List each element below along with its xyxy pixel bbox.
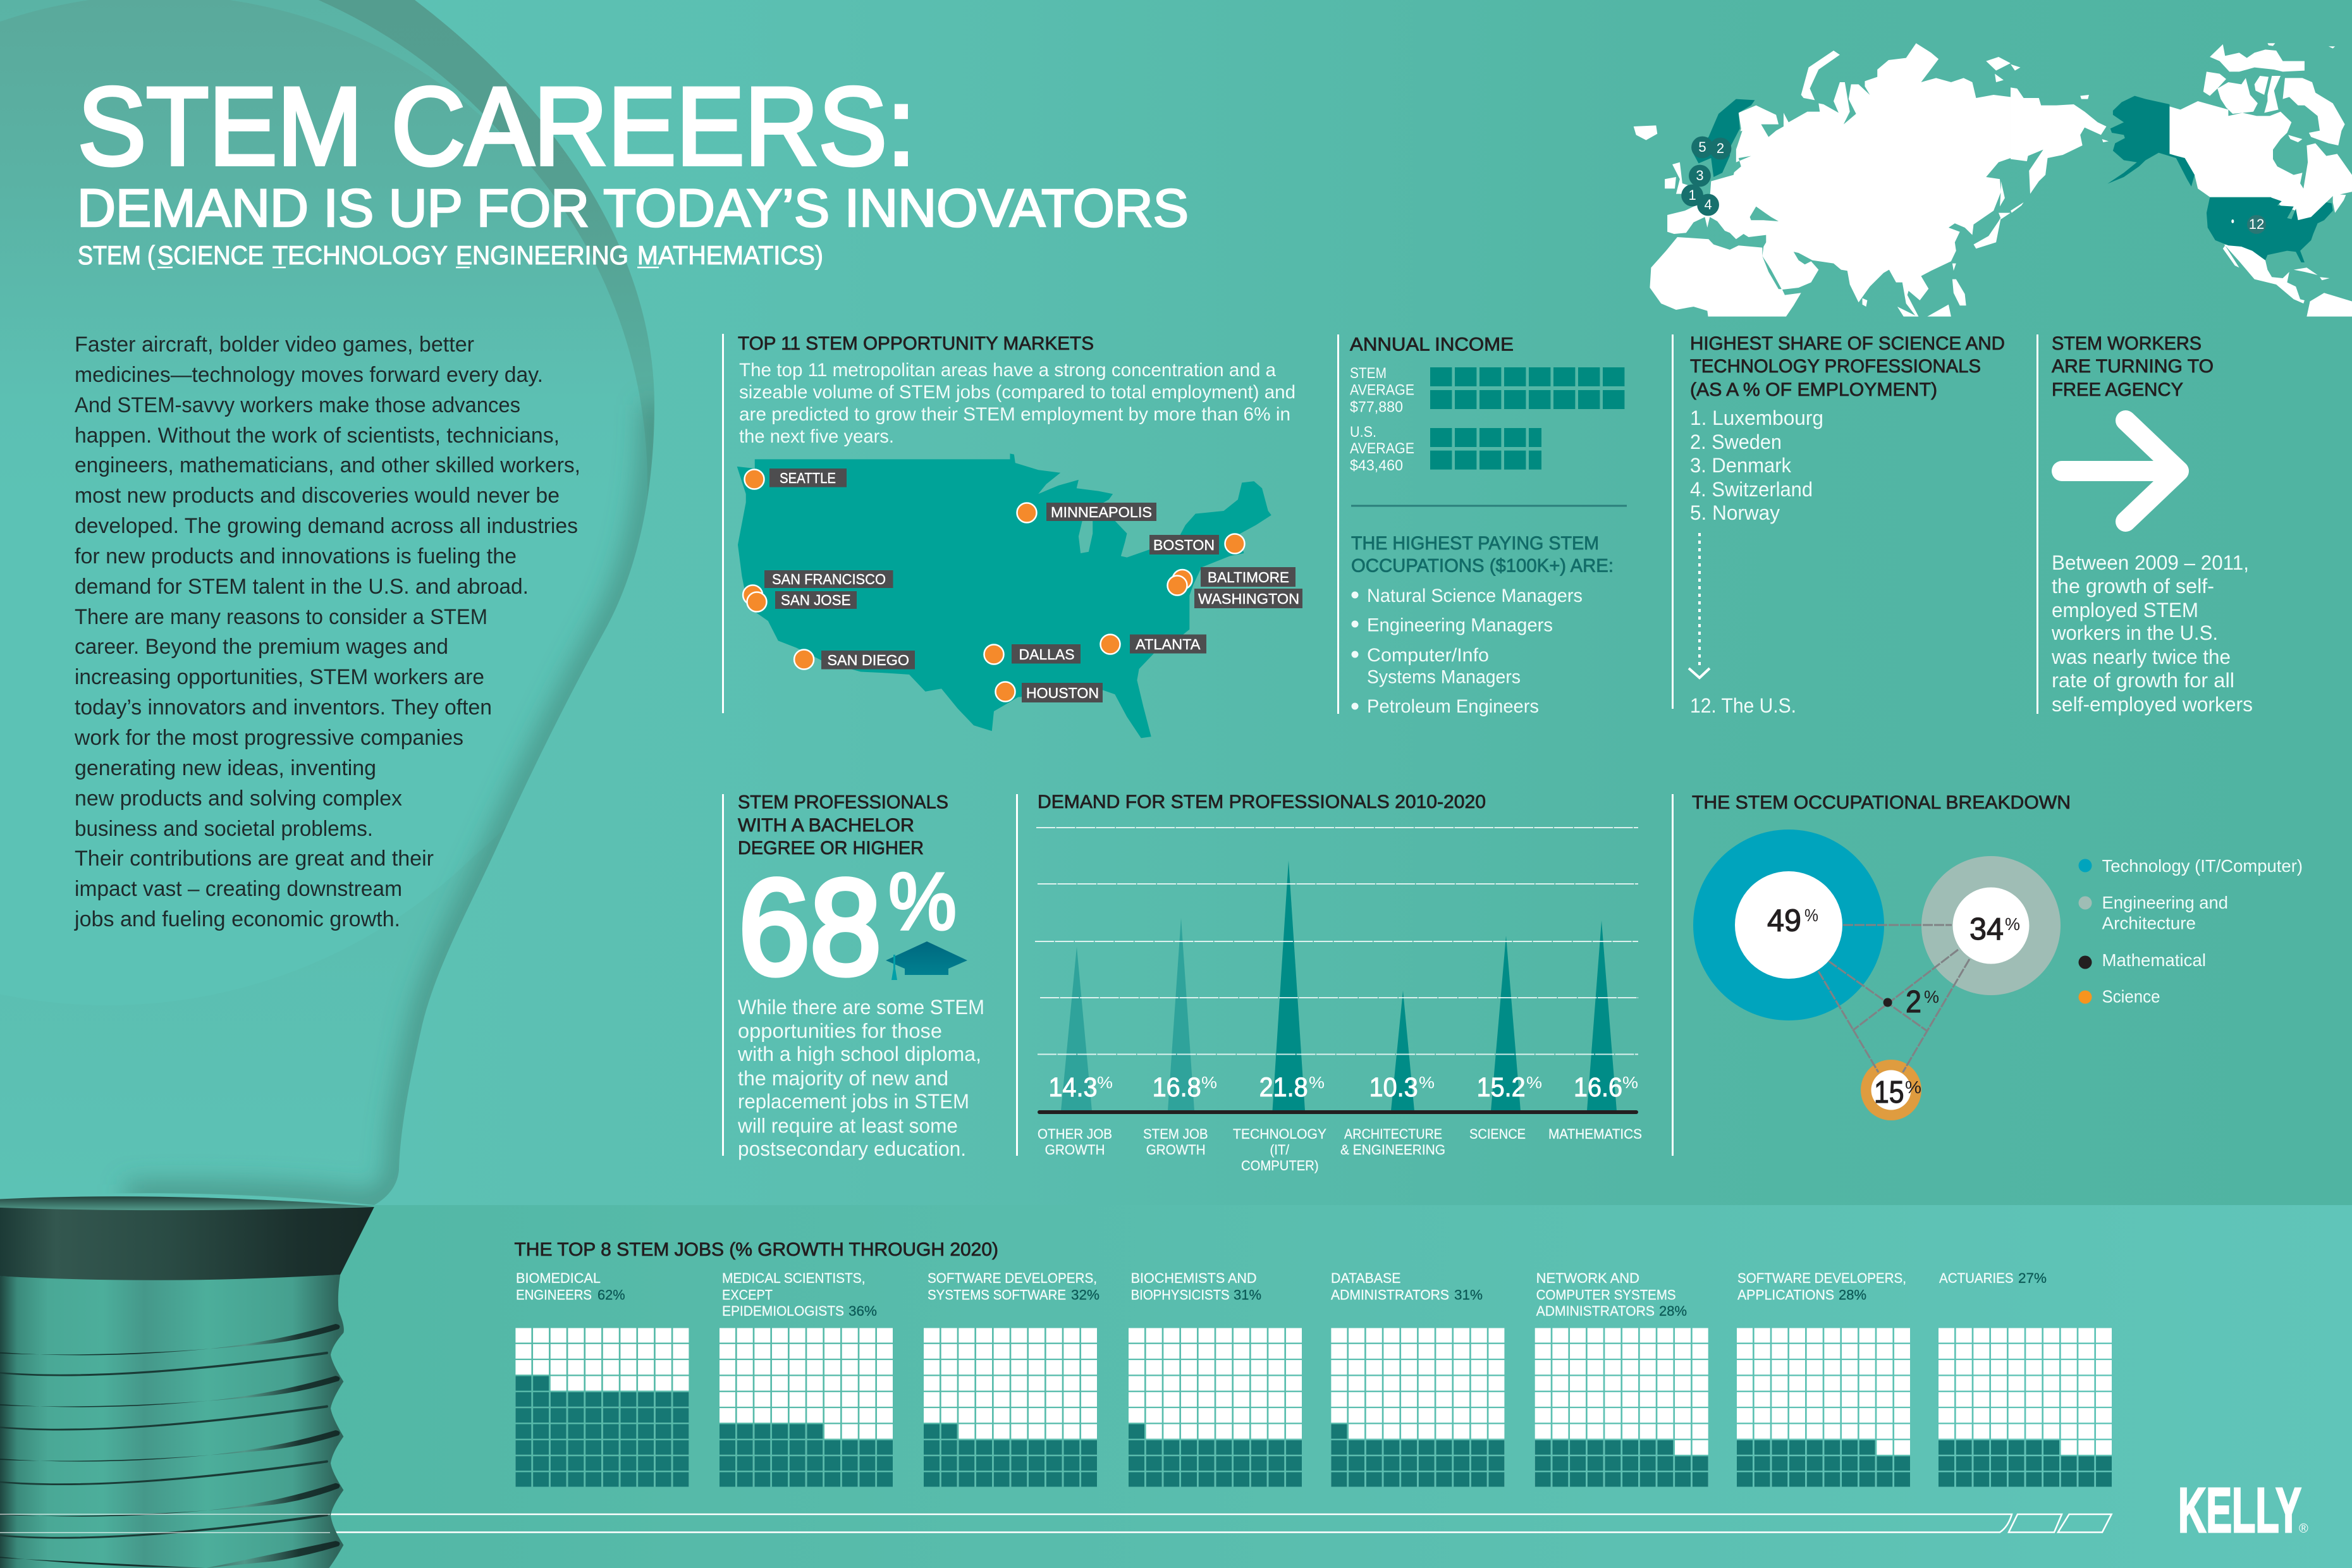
intro paragraph: And STEM-savvy workers make those advances <box>75 393 520 417</box>
description <box>739 360 1295 447</box>
city names: MINNEAPOLIS <box>1051 504 1152 520</box>
description: rate of growth for all <box>2052 669 2234 692</box>
city names: DALLAS <box>1019 646 1075 663</box>
chart category labels <box>1038 1126 1642 1173</box>
chart category labels: ARCHITECTURE <box>1344 1126 1442 1142</box>
city names: SAN FRANCISCO <box>772 571 886 587</box>
donut: science <box>1861 1060 1921 1120</box>
chart values: 21.8 <box>1259 1072 1308 1103</box>
job: database administrators: ADMINISTRATORS <box>1331 1287 1449 1303</box>
description: the next five years. <box>739 426 894 447</box>
intro paragraph: today’s innovators and inventors. They often <box>75 695 492 720</box>
panel: bachelor degree <box>722 792 984 1160</box>
city names: SEATTLE <box>780 470 836 486</box>
light bulb glass <box>0 0 695 1208</box>
description <box>2051 551 2253 716</box>
description: will require at least some <box>737 1114 958 1137</box>
highest paying list <box>1352 585 1583 717</box>
chart values: % <box>1097 1073 1113 1092</box>
description: opportunities for those <box>738 1019 942 1042</box>
intro paragraph <box>74 333 580 931</box>
icon: graduation cap <box>886 941 967 980</box>
intro paragraph: increasing opportunities, STEM workers are <box>75 665 484 689</box>
heading: TECHNOLOGY PROFESSIONALS <box>1690 356 1981 377</box>
panel: occupational breakdown <box>1672 792 2303 1156</box>
heading: STEM PROFESSIONALS <box>738 792 948 813</box>
intro paragraph: jobs and fueling economic growth. <box>74 907 400 931</box>
description: was nearly twice the <box>2051 646 2231 668</box>
job: medical scientists: EXCEPT <box>722 1287 773 1303</box>
intro paragraph: business and societal problems. <box>75 817 373 841</box>
chart grid lines <box>1035 828 1638 1055</box>
chart values: 14.3 <box>1048 1072 1098 1103</box>
job: medical scientists: EPIDEMIOLOGISTS <box>722 1303 844 1319</box>
percent labels: % <box>1924 987 1939 1007</box>
kelly logo: ® <box>2299 1522 2308 1536</box>
acronym line <box>78 240 823 270</box>
highest paying list: Engineering Managers <box>1367 615 1553 636</box>
intro paragraph: demand for STEM talent in the U.S. and abroad. <box>75 575 529 599</box>
city names: ATLANTA <box>1136 636 1201 652</box>
us map <box>737 453 1271 738</box>
legend: Engineering and <box>2102 893 2228 912</box>
city names: HOUSTON <box>1026 685 1099 701</box>
job: database administrators: 31% <box>1454 1287 1483 1303</box>
job: software developers, applications <box>1737 1270 1910 1479</box>
intro paragraph: new products and solving complex <box>75 787 402 811</box>
job: medical scientists: MEDICAL SCIENTISTS, <box>722 1270 865 1286</box>
panel: top 8 stem jobs <box>515 1239 2112 1479</box>
heading <box>738 792 948 859</box>
acronym line: ENGINEERING <box>456 240 628 270</box>
background: upper panel <box>0 0 2352 1205</box>
percent labels: % <box>1905 1077 1921 1097</box>
map rank markers: 3 <box>1696 168 1704 183</box>
job: database administrators: DATABASE <box>1331 1270 1400 1286</box>
description: with a high school diploma, <box>737 1043 981 1065</box>
job: software developers, systems software: SYSTEMS SOFTWARE <box>928 1287 1066 1303</box>
dotted arrow <box>1689 533 1710 678</box>
intro paragraph: generating new ideas, inventing <box>75 756 376 780</box>
percent labels: % <box>1804 905 1818 925</box>
heading: (AS A % OF EMPLOYMENT) <box>1690 379 1937 400</box>
chart category labels: MATHEMATICS <box>1548 1126 1642 1142</box>
job: network and computer systems administrators <box>1535 1270 1708 1479</box>
intro paragraph: happen. Without the work of scientists, technicians, <box>75 424 560 448</box>
job: biomedical engineers: BIOMEDICAL <box>516 1270 601 1286</box>
percent labels: 15 <box>1874 1075 1904 1110</box>
title block <box>77 65 1189 270</box>
us average label <box>1350 424 1414 474</box>
highest paying heading <box>1351 533 1614 577</box>
description: While there are some STEM <box>738 996 984 1019</box>
job: network and computer systems administrators: NETWORK AND <box>1536 1270 1639 1286</box>
chart values <box>1048 1072 1638 1103</box>
job: actuaries: 27% <box>2018 1270 2047 1286</box>
heading: DEMAND FOR STEM PROFESSIONALS 2010-2020 <box>1038 792 1486 812</box>
job: biochemists and biophysicists <box>1129 1270 1302 1479</box>
panel: demand chart <box>1016 792 1642 1173</box>
job: biochemists and biophysicists: BIOCHEMISTS AND <box>1131 1270 1257 1286</box>
acronym line: SCIENCE <box>157 240 264 270</box>
chart values: 15.2 <box>1477 1072 1526 1103</box>
chart values: 16.6 <box>1574 1072 1622 1103</box>
city labels <box>764 469 1302 702</box>
highest paying list: Computer/Info <box>1367 645 1489 666</box>
heading: DEGREE OR HIGHER <box>738 838 924 859</box>
city names <box>772 470 1299 701</box>
chart category labels: TECHNOLOGY <box>1233 1126 1326 1142</box>
legend: Science <box>2102 986 2160 1007</box>
eurasia and africa landmass <box>1634 43 2011 317</box>
chart category labels: (IT/ <box>1270 1142 1290 1158</box>
intro paragraph: career. Beyond the premium wages and <box>75 635 448 659</box>
city names: BALTIMORE <box>1208 569 1289 585</box>
acronym line: TECHNOLOGY <box>273 240 448 270</box>
intro paragraph: for new products and innovations is fueling the <box>75 544 517 568</box>
map rank markers: 4 <box>1704 197 1712 212</box>
description: are predicted to grow their STEM employment by more than 6% in <box>739 404 1290 425</box>
chart category labels: GROWTH <box>1146 1142 1206 1158</box>
intro paragraph: There are many reasons to consider a STEM <box>75 605 487 629</box>
chart values: % <box>1526 1073 1542 1092</box>
chart axis <box>1038 1110 1638 1114</box>
intro paragraph: engineers, mathematicians, and other skilled workers, <box>75 453 580 477</box>
description: postsecondary education. <box>738 1137 966 1160</box>
chart category labels: & ENGINEERING <box>1340 1142 1445 1158</box>
map rank markers: 2 <box>1717 140 1724 156</box>
heading <box>1690 333 2005 400</box>
us average label: U.S. <box>1350 424 1376 441</box>
heading: STEM WORKERS <box>2052 333 2202 354</box>
contiguous us highlighted <box>2207 197 2333 262</box>
job: software developers, applications: APPLICATIONS <box>1737 1287 1834 1303</box>
heading: FREE AGENCY <box>2052 379 2183 400</box>
scandinavia highlighted <box>1693 99 1755 177</box>
description: sizeable volume of STEM jobs (compared to total employment) and <box>739 382 1295 403</box>
intro paragraph: Their contributions are great and their <box>75 847 434 871</box>
job: biomedical engineers <box>515 1270 689 1479</box>
chart values: % <box>1201 1073 1217 1092</box>
map rank markers: 1 <box>1688 187 1696 203</box>
chart values: % <box>1622 1073 1638 1092</box>
us average label: $43,460 <box>1350 457 1403 474</box>
intro paragraph: most new products and discoveries would never be <box>75 484 560 508</box>
legend <box>2079 856 2303 1007</box>
city markers <box>743 469 1244 702</box>
ranked list: 3. Denmark <box>1690 454 1792 477</box>
intro paragraph: impact vast – creating downstream <box>75 877 402 901</box>
intro paragraph: developed. The growing demand across all industries <box>75 514 578 538</box>
stem average label: STEM <box>1350 365 1387 382</box>
heading: THE TOP 8 STEM JOBS (% GROWTH THROUGH 2020) <box>515 1239 998 1260</box>
heading: ARE TURNING TO <box>2052 356 2214 377</box>
job: actuaries <box>1939 1270 2112 1479</box>
heading: WITH A BACHELOR <box>738 815 914 836</box>
city names: SAN JOSE <box>781 592 851 608</box>
chart category labels: COMPUTER) <box>1241 1158 1319 1173</box>
acronym line: STEM ( <box>78 240 155 270</box>
footer stripe graphic <box>330 1514 2112 1533</box>
icon: white arrow <box>2062 420 2179 522</box>
us average label: AVERAGE <box>1350 440 1414 457</box>
description: self-employed workers <box>2052 693 2253 716</box>
heading: TOP 11 STEM OPPORTUNITY MARKETS <box>738 333 1094 354</box>
ranked list: 1. Luxembourg <box>1690 407 1823 429</box>
donut: technology <box>1693 830 1884 1020</box>
heading: THE STEM OCCUPATIONAL BREAKDOWN <box>1692 792 2071 813</box>
chart values: % <box>1309 1073 1325 1092</box>
legend: Mathematical <box>2102 950 2206 970</box>
job: network and computer systems administrators: COMPUTER SYSTEMS <box>1536 1287 1676 1303</box>
chart category labels: OTHER JOB <box>1038 1126 1112 1142</box>
panel: highest share of professionals <box>1672 333 2005 717</box>
ranked list: 5. Norway <box>1690 501 1780 524</box>
job: software developers, systems software: 32% <box>1071 1287 1099 1303</box>
dot: mathematical <box>1883 998 1892 1007</box>
job: biomedical engineers: ENGINEERS <box>516 1287 592 1303</box>
chart category labels: GROWTH <box>1045 1142 1105 1158</box>
intro paragraph: medicines—technology moves forward every day. <box>75 363 543 387</box>
stem average bars <box>1430 377 1627 400</box>
heading <box>2052 333 2214 400</box>
highest paying list: Petroleum Engineers <box>1367 696 1539 717</box>
job: medical scientists <box>720 1270 893 1479</box>
chart category labels: SCIENCE <box>1469 1126 1526 1142</box>
light bulb screw base <box>0 1196 374 1568</box>
background: lower panel <box>0 1205 2352 1568</box>
chart values: % <box>1419 1073 1435 1092</box>
us average bars <box>1430 438 1541 460</box>
highest paying heading: THE HIGHEST PAYING STEM <box>1351 533 1599 554</box>
big stat: 68% <box>738 852 957 1003</box>
intro paragraph: work for the most progressive companies <box>74 726 463 750</box>
intro paragraph: Faster aircraft, bolder video games, better <box>75 333 474 357</box>
city names: SAN DIEGO <box>827 652 909 668</box>
job: software developers, applications: 28% <box>1839 1287 1866 1303</box>
map rank markers <box>1681 137 2266 234</box>
connector lines <box>1818 925 1969 1072</box>
alaska highlighted <box>2107 96 2195 187</box>
chart spikes <box>1061 861 1617 1111</box>
panel: free agency <box>2037 333 2253 716</box>
job: network and computer systems administrators: 28% <box>1659 1303 1687 1319</box>
highest paying list: Natural Science Managers <box>1367 585 1583 606</box>
city names: BOSTON <box>1153 537 1215 553</box>
russian far east, americas landmass <box>2011 43 2352 317</box>
legend: Architecture <box>2102 913 2196 933</box>
description <box>737 996 984 1160</box>
subtitle: DEMAND IS UP FOR TODAY’S INNOVATORS <box>77 178 1189 238</box>
job: biochemists and biophysicists: 31% <box>1234 1287 1261 1303</box>
percent labels: 49 <box>1767 904 1801 938</box>
map rank markers: 12 <box>2249 216 2264 232</box>
chart category labels: STEM JOB <box>1143 1126 1208 1142</box>
description: employed STEM <box>2052 599 2198 622</box>
percent labels <box>1767 904 2020 1110</box>
job: database administrators <box>1331 1270 1504 1479</box>
job: software developers, systems software <box>924 1270 1099 1479</box>
job: software developers, systems software: SOFTWARE DEVELOPERS, <box>928 1270 1097 1286</box>
us rank: 12. The U.S. <box>1690 694 1796 717</box>
legend: Technology (IT/Computer) <box>2102 856 2303 876</box>
description: Between 2009 – 2011, <box>2052 551 2249 574</box>
percent labels: 2 <box>1906 985 1921 1019</box>
city names: WASHINGTON <box>1198 591 1299 607</box>
description: The top 11 metropolitan areas have a strong concentration and a <box>739 360 1276 381</box>
description: the majority of new and <box>738 1067 948 1090</box>
map rank markers: 5 <box>1698 139 1706 155</box>
job: biochemists and biophysicists: BIOPHYSICISTS <box>1131 1287 1230 1303</box>
chart values: 10.3 <box>1369 1072 1418 1103</box>
job: actuaries: ACTUARIES <box>1939 1270 2014 1286</box>
panel: top 11 opportunity markets <box>722 333 1302 738</box>
faint stripes across the screw base <box>0 1514 330 1533</box>
stem average label <box>1350 365 1414 416</box>
acronym line: MATHEMATICS) <box>637 240 823 270</box>
highest paying list: Systems Managers <box>1367 666 1521 688</box>
description: replacement jobs in STEM <box>738 1090 969 1113</box>
main title: STEM CAREERS: <box>78 65 916 188</box>
job: network and computer systems administrators: ADMINISTRATORS <box>1536 1303 1655 1319</box>
description: workers in the U.S. <box>2051 622 2218 644</box>
big stat: 68%: 68 <box>738 852 881 1003</box>
description: the growth of self- <box>2052 575 2214 597</box>
percent labels: 34 <box>1969 912 2004 946</box>
chart values: 16.8 <box>1153 1072 1201 1103</box>
world map <box>1634 43 2352 317</box>
heading: ANNUAL INCOME <box>1350 334 1514 355</box>
highest paying heading: OCCUPATIONS ($100K+) ARE: <box>1351 555 1614 577</box>
job: biomedical engineers: 62% <box>597 1287 625 1303</box>
stem average label: AVERAGE <box>1350 382 1414 398</box>
heading: HIGHEST SHARE OF SCIENCE AND <box>1690 333 2005 354</box>
percent labels: % <box>2005 914 2020 934</box>
job: medical scientists: 36% <box>848 1303 877 1319</box>
ranked list: 4. Switzerland <box>1690 478 1813 501</box>
ranked list <box>1690 407 1823 524</box>
job: software developers, applications: SOFTWARE DEVELOPERS, <box>1737 1270 1906 1286</box>
donut: engineering <box>1921 856 2061 995</box>
ranked list: 2. Sweden <box>1690 431 1782 453</box>
stem average label: $77,880 <box>1350 398 1403 416</box>
panel: annual income <box>1337 334 1627 717</box>
big stat: 68%: % <box>888 857 957 947</box>
